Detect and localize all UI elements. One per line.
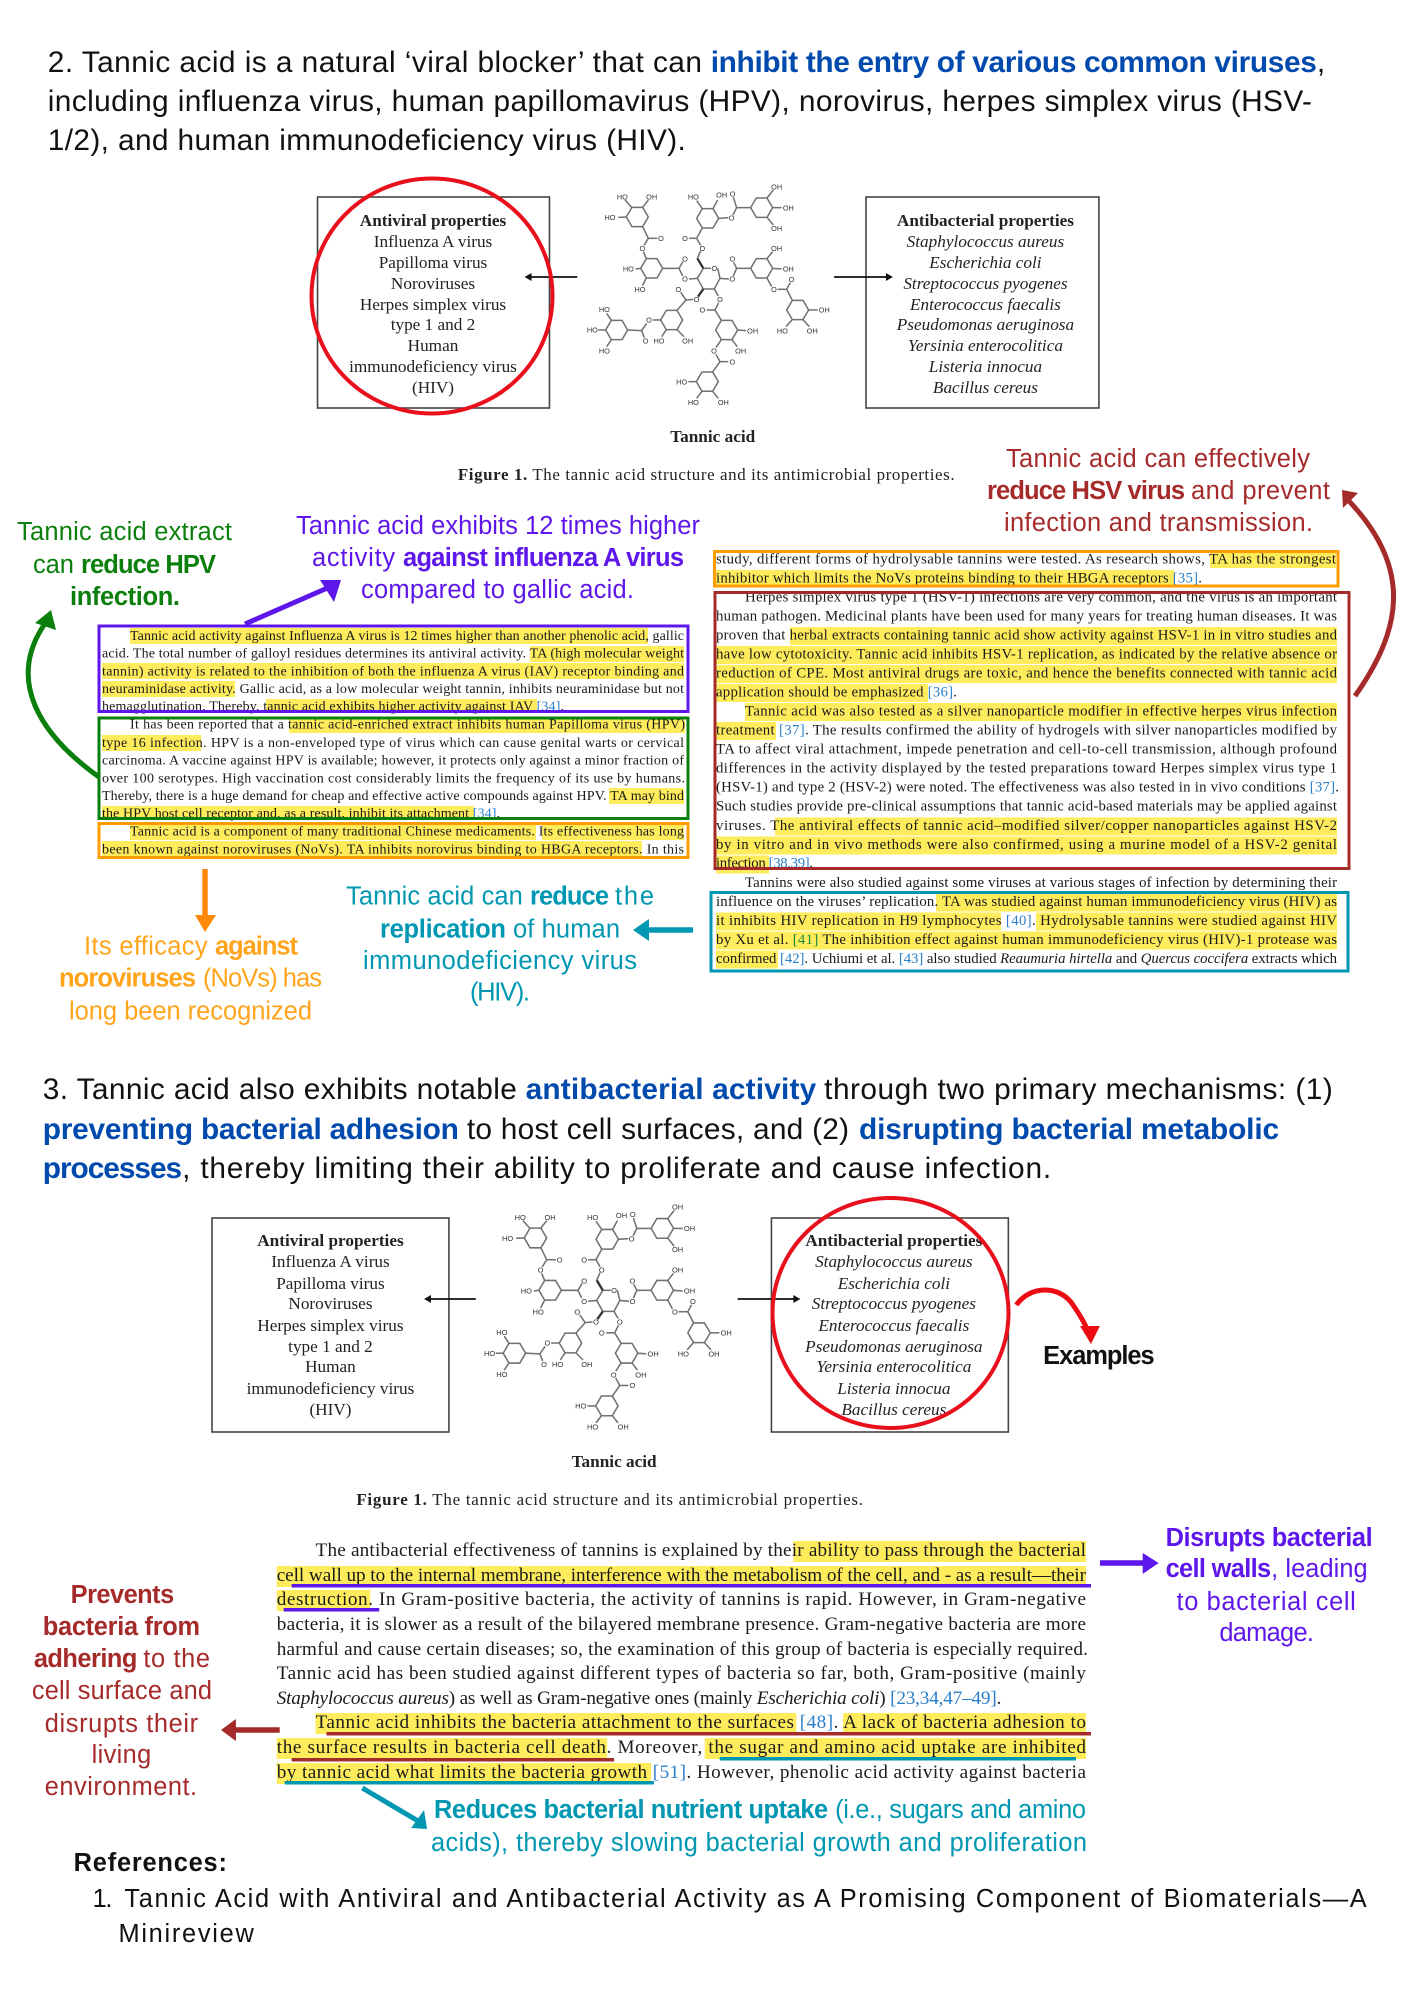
- panel: antiviral properties: Antiviral properties: [360, 211, 506, 230]
- panel: bottom literature excerpt: [277, 1540, 1091, 1784]
- panel: antiviral properties: Noroviruses: [288, 1294, 373, 1313]
- callout: norovirus: long been recognized: [69, 998, 312, 1026]
- callout: cell walls: cell walls: [1166, 1555, 1271, 1583]
- chemical structure: tannic acid: OH: [716, 191, 727, 200]
- chemical structure: tannic acid: O: [729, 213, 735, 222]
- panel: antiviral properties: Noroviruses: [391, 274, 475, 293]
- chemical structure: tannic acid: O: [646, 316, 652, 325]
- callout: nutrient uptake: (i.e., sugars and amino: [835, 1796, 1086, 1824]
- references: References:: [74, 1849, 227, 1877]
- heading: section 2: 1/2), and human immunodeficiency virus (HIV).: [48, 124, 686, 157]
- callout: HIV: replication: [380, 916, 506, 944]
- chemical structure: tannic acid: OH: [672, 1245, 683, 1254]
- arrow: purple to influenza callout: [245, 580, 341, 624]
- callout: cell walls: Disrupts bacterial: [1166, 1524, 1373, 1552]
- chemical structure: tannic acid: O: [541, 1360, 547, 1369]
- callout: HIV: reduce: [530, 882, 609, 910]
- underlines: mechanisms: [284, 1584, 1091, 1784]
- text: HIV excerpt: [716, 875, 1338, 967]
- chemical structure: tannic acid: O: [699, 244, 705, 253]
- chemical structure: tannic acid: OH: [708, 1350, 720, 1359]
- text: influenza excerpt: tannin) activity is related to the inhibition of both the influenza A virus (IAV) receptor binding and: [102, 664, 684, 679]
- panel: antiviral properties: type 1 and 2: [391, 315, 475, 334]
- chemical structure: tannic acid: O: [789, 275, 795, 284]
- chemical structure: tannic acid: OH: [771, 244, 782, 253]
- box: influenza: [99, 626, 688, 712]
- caption: figure 1: Figure 1. The tannic acid structure and its antimicrobial properties.: [458, 465, 955, 484]
- chemical structure: tannic acid: HO: [599, 305, 610, 314]
- panel: antibacterial properties: [866, 197, 1099, 408]
- chemical structure: tannic acid: HO: [688, 192, 699, 201]
- callout: HIV: [346, 882, 654, 1006]
- heading: section 3: processes: [43, 1152, 182, 1185]
- figure: tannic acid properties (section 2): [312, 178, 1099, 484]
- chemical structure: tannic acid: HO: [502, 1234, 513, 1243]
- arrow: orange to norovirus callout: [195, 869, 216, 932]
- chemical structure: tannic acid: O: [629, 1276, 635, 1285]
- chemical structure: tannic acid: OH: [682, 336, 693, 345]
- chemical structure: tannic acid: O: [629, 1234, 635, 1243]
- text: norovirus continued: [716, 551, 1337, 586]
- text: HSV excerpt: Herpes simplex virus type 1 (HSV-1) infections are very common, and the virus is an important: [745, 590, 1338, 606]
- panel: antiviral properties: Influenza A virus: [271, 1252, 390, 1271]
- chemical structure: tannic acid: HO: [587, 1423, 598, 1432]
- callout: norovirus: Its efficacy: [84, 932, 215, 960]
- callout: cell walls: [1166, 1524, 1373, 1647]
- chemical structure: tannic acid: O: [544, 1339, 550, 1348]
- chemical structure: tannic acid: OH: [648, 1350, 659, 1359]
- text: norovirus excerpt: Tannic acid is a component of many traditional Chinese medicaments. Its effectiveness has long: [130, 825, 684, 840]
- text: bottom excerpt: Staphylococcus aureus) as well as Gram-negative ones (mainly Escherichia coli) [23,34,47–49].: [277, 1688, 1001, 1709]
- references: [74, 1849, 1367, 1948]
- heading: section 2: ,: [1317, 46, 1325, 79]
- text: HSV excerpt: (HSV-1) and type 2 (HSV-2) were noted. The effectiveness was also tested in in vivo conditions [37].: [716, 780, 1339, 796]
- text: HIV excerpt: by Xu et al. [41] The inhibition effect against human immunodeficiency virus (HIV)-1 protease was: [716, 932, 1337, 948]
- panel: antibacterial properties: Pseudomonas aeruginosa: [896, 315, 1074, 334]
- panel: antiviral properties: Human: [408, 336, 459, 355]
- chemical structure: tannic acid: O: [574, 1307, 580, 1316]
- arrow: to antibacterial: [834, 273, 893, 281]
- callout: norovirus: (NoVs) has: [203, 964, 322, 992]
- chemical structure: tannic acid: O: [599, 1266, 605, 1275]
- panel: antiviral properties: Herpes simplex virus: [360, 295, 506, 314]
- chemical structure: tannic acid: OH: [819, 306, 830, 315]
- text: bottom excerpt: harmful and cause certain diseases; so, the examination of this group of bacteria is especially required.: [277, 1639, 1088, 1660]
- text: HSV excerpt: Such studies provide pre-clinical assumptions that tannic acid-based materials may be applied against: [716, 799, 1338, 815]
- callout: adhesion: to the: [143, 1645, 210, 1673]
- text: influenza excerpt: neuraminidase activity. Gallic acid, as a low molecular weight tannin, inhibits neuraminidase but not: [102, 682, 684, 697]
- chemical structure: tannic acid: O: [675, 285, 681, 294]
- chemical structure: tannic acid: HO: [533, 1307, 544, 1316]
- callout: influenza: activity: [312, 544, 403, 572]
- caption: figure 1: Figure 1. The tannic acid structure and its antimicrobial properties.: [356, 1490, 863, 1509]
- label: examples: Examples: [1043, 1342, 1155, 1370]
- panel: antiviral properties: Influenza A virus: [374, 232, 493, 251]
- chemical structure: tannic acid: O: [682, 275, 688, 284]
- callout: adhesion: adhering: [34, 1645, 137, 1673]
- heading: section 3: preventing bacterial adhesion: [43, 1113, 459, 1146]
- chemical structure: tannic acid: OH: [735, 347, 746, 356]
- callout: norovirus: [59, 932, 322, 1026]
- chemical structure: tannic acid: OH: [616, 1211, 627, 1220]
- panel: antiviral properties: Papilloma virus: [276, 1274, 385, 1293]
- callout: HPV: can: [33, 551, 81, 579]
- panel: antiviral properties: [318, 197, 549, 408]
- panel: antiviral properties: Papilloma virus: [379, 253, 488, 272]
- chemical structure: tannic acid: [484, 1203, 732, 1432]
- callout: HPV: Tannic acid extract: [17, 518, 232, 546]
- callout: norovirus: against: [215, 932, 298, 960]
- chemical structure: tannic acid: HO: [623, 265, 634, 274]
- text: norovirus continued: study, different forms of hydrolysable tannins were tested. As research shows, TA has the strongest: [716, 551, 1337, 567]
- text: influenza excerpt: hemagglutination. Thereby, tannic acid exhibits higher activity against IAV [34].: [102, 700, 564, 715]
- chemical structure: tannic acid: O: [658, 234, 664, 243]
- callout ring: antiviral: [312, 178, 552, 414]
- panel: antibacterial properties: Escherichia coli: [928, 253, 1042, 272]
- text: HIV excerpt: Tannins were also studied against some viruses at various stages of infection by determining their: [745, 875, 1337, 891]
- chemical structure: tannic acid: OH: [618, 1423, 629, 1432]
- arrow: to antiviral: [424, 1295, 476, 1303]
- callout: influenza: compared to gallic acid.: [361, 576, 634, 604]
- chemical structure: tannic acid: O: [617, 1318, 623, 1327]
- text: influenza excerpt: acid. The total number of galloyl residues determines its antiviral activity. TA (high molecular weight: [102, 647, 684, 662]
- box: norovirus continued: [714, 552, 1338, 586]
- panel: antiviral properties: Human: [305, 1357, 356, 1376]
- text: HPV excerpt: It has been reported that a tannic acid-enriched extract inhibits human Papilloma virus (HPV): [130, 718, 685, 733]
- callout: HSV: Tannic acid can effectively: [1006, 445, 1310, 473]
- references: 1.: [93, 1885, 112, 1913]
- panel: right literature excerpt: [711, 551, 1349, 971]
- chemical structure: tannic acid: O: [639, 244, 645, 253]
- text: HSV excerpt: proven that herbal extracts containing tannic acid show activity against HSV-1 in in vitro studies and: [716, 628, 1338, 644]
- chemical structure: tannic acid: O: [643, 337, 649, 346]
- chemical structure: tannic acid: O: [557, 1255, 563, 1264]
- heading: section 3: through two primary mechanisms: (1): [824, 1073, 1333, 1106]
- heading: section 2: including influenza virus, human papillomavirus (HPV), norovirus, herpes simplex virus (HSV-: [48, 85, 1312, 118]
- arrow: green to HPV callout: [28, 610, 99, 777]
- text: HSV excerpt: reduction of CPE. Most antiviral drugs are toxic, and hence the benefits connected with tannic acid: [716, 666, 1338, 682]
- callout: HSV: and prevent: [1191, 477, 1330, 505]
- heading: section 3: , thereby limiting their ability to proliferate and cause infection.: [182, 1152, 1051, 1185]
- callout: adhesion: bacteria from: [43, 1613, 200, 1641]
- chemical structure: tannic acid: OH: [684, 1224, 695, 1233]
- chemical structure: tannic acid: O: [672, 1307, 678, 1316]
- text: HPV excerpt: carcinoma. A vaccine against HPV is available; however, it protects only against a minor fraction of: [102, 754, 684, 769]
- callout: HSV: infection and transmission.: [1004, 509, 1313, 537]
- chemical structure: tannic acid: O: [611, 1286, 617, 1295]
- chemical structure: tannic acid: OH: [771, 224, 782, 233]
- chemical structure: tannic acid: O: [538, 1266, 544, 1275]
- chemical structure: tannic acid: HO: [599, 346, 610, 355]
- references: Tannic Acid with Antiviral and Antibacterial Activity as A Promising Component of Biomaterials—A: [124, 1885, 1367, 1913]
- callout: adhesion: living: [92, 1741, 151, 1769]
- heading: section 2: [48, 46, 1325, 157]
- text: HPV excerpt: over 100 serotypes. High vaccination cost considerably limits the frequency of its use by humans.: [102, 771, 685, 786]
- text: HIV excerpt: influence on the viruses’ replication. TA was studied against human immunodeficiency virus (HIV) as: [716, 894, 1337, 910]
- chemical structure: tannic acid: O: [699, 306, 705, 315]
- text: norovirus excerpt: been known against noroviruses (NoVs). TA inhibits norovirus binding to HBGA receptors. In this: [102, 842, 684, 857]
- heading: section 2: 2. Tannic acid is a natural ‘viral blocker’ that can: [48, 46, 711, 79]
- callout: adhesion: Prevents: [71, 1581, 174, 1609]
- chemical structure: tannic acid: OH: [807, 326, 818, 335]
- chemical structure: tannic acid: HO: [515, 1213, 526, 1222]
- text: HSV excerpt: treatment [37]. The results confirmed the ability of hydrogels with silver nanoparticles modified by: [716, 723, 1338, 739]
- panel: antibacterial properties: Listeria innocua: [836, 1379, 951, 1398]
- chemical structure: tannic acid: OH: [581, 1360, 592, 1369]
- box: HPV: [99, 718, 688, 818]
- chemical structure: tannic acid: O: [694, 295, 700, 304]
- callout ring: antibacterial: [772, 1198, 1008, 1428]
- chemical structure: tannic acid: O: [599, 1329, 605, 1338]
- panel: antibacterial properties: Staphylococcus aureus: [815, 1252, 973, 1271]
- chemical structure: tannic acid: HO: [521, 1287, 532, 1296]
- callout: cell walls: to bacterial cell: [1177, 1588, 1356, 1616]
- text: HSV excerpt: by in vitro and in vivo methods were also confirmed, using a murine model of a HSV-2 genital: [716, 837, 1337, 853]
- chemical structure: tannic acid: O: [729, 357, 735, 366]
- panel: antiviral properties: immunodeficiency virus: [349, 357, 517, 376]
- callout: adhesion: cell surface and: [32, 1677, 212, 1705]
- panel: antibacterial properties: [771, 1218, 1008, 1432]
- callout: influenza: [296, 512, 700, 604]
- text: HSV excerpt: human pathogen. Medicinal plants have been used for many years for treating human diseases. It was: [716, 609, 1337, 625]
- highlights: right excerpt: [716, 551, 1337, 968]
- callout: HIV: Tannic acid can: [346, 882, 530, 910]
- chemical structure: tannic acid: HO: [634, 285, 646, 294]
- text: HPV excerpt: [102, 718, 685, 822]
- chemical structure: tannic acid: HO: [484, 1349, 495, 1358]
- heading: section 2: inhibit the entry of various common viruses: [711, 46, 1317, 79]
- panel: antiviral properties: immunodeficiency virus: [247, 1379, 415, 1398]
- chemical structure: tannic acid: OH: [718, 398, 729, 407]
- chemical structure: tannic acid: HO: [678, 1350, 689, 1359]
- chemical structure: tannic acid: OH: [771, 182, 782, 191]
- text: bottom excerpt: The antibacterial effectiveness of tannins is explained by their ability to pass through the bacterial: [316, 1540, 1086, 1561]
- chemical structure: tannic acid: HO: [587, 326, 598, 335]
- callout: influenza: against influenza A virus: [403, 544, 684, 572]
- chemical structure: tannic acid: OH: [684, 1287, 695, 1296]
- heading: section 3: antibacterial activity: [526, 1073, 817, 1106]
- callout: HIV: the: [615, 882, 654, 910]
- callout: norovirus: noroviruses: [59, 964, 196, 992]
- chemical structure: tannic acid: OH: [635, 1370, 646, 1379]
- callout: nutrient uptake: Reduces bacterial nutrient uptake: [434, 1796, 828, 1824]
- panel: antibacterial properties: Yersinia enterocolitica: [816, 1357, 971, 1376]
- text: HSV excerpt: infection [38,39].: [716, 856, 813, 872]
- chemical structure: tannic acid: HO: [587, 1213, 598, 1222]
- chemical structure: tannic acid: O: [629, 1297, 635, 1306]
- chemical structure: tannic acid: O: [630, 1210, 636, 1219]
- chemical structure: tannic acid: O: [581, 1276, 587, 1285]
- text: bottom excerpt: by tannic acid what limits the bacteria growth [51]. However, phenolic acid activity against bacteria: [277, 1762, 1086, 1783]
- callout: influenza: Tannic acid exhibits 12 times higher: [296, 512, 700, 540]
- callout: HPV: reduce HPV: [81, 551, 216, 579]
- chemical structure: tannic acid: OH: [783, 265, 794, 274]
- heading: section 3: 3. Tannic acid also exhibits notable: [43, 1073, 526, 1106]
- text: HPV excerpt: Thereby, there is a huge demand for cheap and effective active compounds against HPV. TA may bind: [102, 789, 684, 804]
- panel: antibacterial properties: Streptococcus pyogenes: [812, 1294, 976, 1313]
- callout: cell walls: , leading: [1271, 1555, 1368, 1583]
- callout: adhesion: environment.: [45, 1773, 197, 1801]
- arrow: brown to HSV callout: [1342, 490, 1394, 696]
- panel: antibacterial properties: Listeria innocua: [928, 357, 1042, 376]
- chemical structure: tannic acid: HO: [777, 326, 788, 335]
- panel: antibacterial properties: Pseudomonas aeruginosa: [804, 1337, 983, 1356]
- chemical structure: tannic acid: HO: [617, 192, 628, 201]
- text: bottom excerpt: cell wall up to the internal membrane, interference with the metabolism of the cell, and - as a result—their: [277, 1565, 1087, 1586]
- callout: adhesion: [32, 1581, 212, 1801]
- chemical structure: tannic acid: HO: [552, 1360, 563, 1369]
- chemical structure: tannic acid: O: [581, 1297, 587, 1306]
- text: HSV excerpt: Tannic acid was also tested as a silver nanoparticle modifier in effective herpes virus infection: [745, 704, 1338, 720]
- chemical structure: tannic acid: O: [682, 255, 688, 264]
- callout: cell walls: damage.: [1219, 1619, 1314, 1647]
- label: tannic acid: Tannic acid: [572, 1452, 657, 1471]
- panel: left literature excerpt: [99, 626, 688, 858]
- panel: antibacterial properties: Bacillus cereus: [933, 378, 1038, 397]
- box: norovirus: [99, 824, 688, 858]
- panel: antibacterial properties: Escherichia coli: [837, 1274, 950, 1293]
- heading: section 3: [43, 1073, 1333, 1185]
- chemical structure: tannic acid: OH: [544, 1213, 556, 1222]
- text: influenza excerpt: [102, 629, 684, 715]
- text: bottom excerpt: bacteria, it is slower as a result of the bilayered membrane presence. Gram-negative bacteria are more: [277, 1614, 1086, 1635]
- chemical structure: tannic acid: O: [717, 295, 723, 304]
- callout: HIV: immunodeficiency virus: [363, 947, 637, 975]
- panel: antiviral properties: (HIV): [309, 1400, 352, 1419]
- arrow: purple to cell walls callout: [1100, 1553, 1159, 1574]
- chemical structure: tannic acid: OH: [721, 1329, 732, 1338]
- chemical structure: tannic acid: OH: [672, 1203, 683, 1212]
- highlights: left excerpt: [102, 628, 685, 857]
- chemical structure: tannic acid: HO: [676, 377, 687, 386]
- panel: antibacterial properties: Staphylococcus aureus: [907, 232, 1065, 251]
- chemical structure: tannic acid: O: [629, 1381, 635, 1390]
- chemical structure: tannic acid: O: [682, 234, 688, 243]
- panel: antiviral properties: (HIV): [412, 378, 454, 397]
- panel: antiviral properties: type 1 and 2: [288, 1337, 373, 1356]
- heading: section 3: to host cell surfaces, and (2): [467, 1113, 849, 1146]
- callout: adhesion: disrupts their: [45, 1710, 199, 1738]
- arrow: brown to adhesion callout: [221, 1719, 280, 1741]
- text: bottom excerpt: the surface results in bacteria cell death. Moreover, the sugar and amino acid uptake are inhibited: [277, 1737, 1086, 1758]
- chemical structure: tannic acid: OH: [672, 1266, 683, 1275]
- callout: HIV: (HIV).: [470, 978, 530, 1006]
- panel: antibacterial properties: Enterococcus faecalis: [817, 1316, 970, 1335]
- text: bottom excerpt: [277, 1540, 1088, 1783]
- text: HSV excerpt: have low cytotoxicity. Tannic acid inhibits HSV-1 replication, as indicated by the relative absence or: [716, 647, 1337, 663]
- arrow: to antiviral: [525, 273, 577, 281]
- panel: antiviral properties: Antiviral properties: [257, 1231, 404, 1250]
- text: HSV excerpt: TA to affect viral attachment, impede penetration and cell-to-cell transmission, although profound: [716, 742, 1338, 758]
- callout: HPV: infection.: [70, 583, 180, 611]
- chemical structure: tannic acid: HO: [575, 1402, 586, 1411]
- box: HIV: [711, 892, 1348, 971]
- chemical structure: tannic acid: O: [593, 1318, 599, 1327]
- callout: HPV: [17, 518, 232, 611]
- chemical structure: tannic acid: O: [611, 1370, 617, 1379]
- panel: antibacterial properties: Antibacterial properties: [897, 211, 1074, 230]
- chemical structure: tannic acid: HO: [496, 1328, 508, 1337]
- chemical structure: tannic acid: O: [771, 285, 777, 294]
- panel: antibacterial properties: Streptococcus pyogenes: [903, 274, 1068, 293]
- callout: HSV: reduce HSV virus: [987, 477, 1185, 505]
- chemical structure: tannic acid: [587, 182, 830, 407]
- chemical structure: tannic acid: OH: [783, 203, 794, 212]
- chemical structure: tannic acid: OH: [747, 326, 758, 335]
- panel: antibacterial properties: Yersinia enterocolitica: [908, 336, 1063, 355]
- text: HSV excerpt: viruses. The antiviral effects of tannic acid–modified silver/copper nanoparticles against HSV-2: [716, 818, 1337, 834]
- chemical structure: tannic acid: O: [729, 275, 735, 284]
- text: bottom excerpt: Tannic acid has been studied against different types of bacteria so far, both, Gram-positive (mainly: [277, 1663, 1086, 1684]
- panel: antiviral properties: [212, 1218, 449, 1432]
- text: bottom excerpt: Tannic acid inhibits the bacteria attachment to the surfaces [48]. A lack of bacteria adhesion to: [316, 1712, 1086, 1733]
- callout: nutrient uptake: [431, 1796, 1087, 1857]
- chemical structure: tannic acid: HO: [496, 1370, 508, 1379]
- arrow: to antibacterial: [738, 1295, 800, 1303]
- text: HSV excerpt: [716, 590, 1339, 872]
- panel: antiviral properties: Herpes simplex virus: [257, 1316, 404, 1335]
- panel: antibacterial properties: Enterococcus faecalis: [909, 295, 1061, 314]
- text: HPV excerpt: type 16 infection. HPV is a non-enveloped type of virus which can cause genital warts or cervical: [102, 736, 684, 751]
- text: bottom excerpt: destruction. In Gram-positive bacteria, the activity of tannins is rapid. However, in Gram-negative: [277, 1589, 1086, 1610]
- callout: nutrient uptake: acids), thereby slowing bacterial growth and proliferation: [431, 1829, 1087, 1857]
- chemical structure: tannic acid: HO: [653, 336, 665, 345]
- text: norovirus excerpt: [102, 825, 684, 857]
- text: HSV excerpt: application should be emphasized [36].: [716, 685, 957, 701]
- text: HIV excerpt: it inhibits HIV replication in H9 lymphocytes [40]. Hydrolysable tannins were studied against HIV: [716, 913, 1337, 929]
- arrow: teal to nutrient callout: [362, 1788, 427, 1829]
- callout: HSV: [987, 445, 1330, 537]
- chemical structure: tannic acid: HO: [604, 213, 616, 222]
- panel: antibacterial properties: Antibacterial properties: [805, 1231, 983, 1250]
- text: influenza excerpt: Tannic acid activity against Influenza A virus is 12 times higher than another phenolic acid, gallic: [130, 629, 684, 644]
- label: tannic acid: Tannic acid: [670, 427, 756, 446]
- chemical structure: tannic acid: O: [690, 1297, 696, 1306]
- heading: section 3: disrupting bacterial metabolic: [859, 1113, 1279, 1146]
- text: HPV excerpt: the HPV host cell receptor and, as a result, inhibit its attachment [34].: [102, 807, 500, 822]
- highlights: bottom excerpt: [277, 1541, 1086, 1784]
- references: Minireview: [118, 1920, 254, 1948]
- chemical structure: tannic acid: O: [711, 347, 717, 356]
- arrow: red to examples: [1016, 1290, 1100, 1344]
- figure: tannic acid properties (section 3): [212, 1198, 1008, 1509]
- chemical structure: tannic acid: O: [581, 1255, 587, 1264]
- chemical structure: tannic acid: O: [729, 255, 735, 264]
- chemical structure: tannic acid: O: [711, 264, 717, 273]
- text: HIV excerpt: confirmed [42]. Uchiumi et al. [43] also studied Reaumuria hirtella and Quercus coccifera extracts which: [716, 951, 1338, 967]
- callout: HIV: of human: [513, 916, 620, 944]
- chemical structure: tannic acid: HO: [688, 398, 699, 407]
- arrow: teal to HIV callout: [633, 919, 693, 941]
- chemical structure: tannic acid: O: [730, 190, 736, 199]
- text: HSV excerpt: differences in the activity displayed by the tested preparations toward Herpes simplex virus type 1: [716, 761, 1337, 777]
- panel: antibacterial properties: Bacillus cereus: [841, 1400, 947, 1419]
- text: norovirus continued: inhibitor which limits the NoVs proteins binding to their HBGA receptors [35].: [716, 570, 1202, 586]
- box: HSV: [715, 592, 1349, 868]
- chemical structure: tannic acid: OH: [646, 192, 657, 201]
